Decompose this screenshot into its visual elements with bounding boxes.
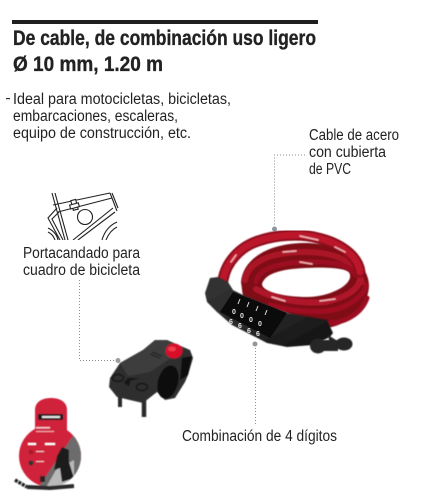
lock photo xyxy=(205,235,369,354)
digits: 0 xyxy=(249,317,253,324)
label: steel cable xyxy=(309,127,399,178)
title xyxy=(13,27,316,76)
lock body xyxy=(205,277,333,347)
leader line: bracket xyxy=(80,280,120,363)
title: Ø 10 mm, 1.20 m xyxy=(13,53,163,76)
digits: 6 xyxy=(247,328,251,335)
leader line: steel cable xyxy=(272,155,305,232)
product package xyxy=(15,398,84,491)
label: bicycle frame bracket: cuadro de bicicleta xyxy=(23,262,140,279)
key xyxy=(310,335,352,354)
label: steel cable: Cable de acero xyxy=(309,127,399,144)
label: steel cable: de PVC xyxy=(309,161,351,178)
leader line: combination xyxy=(252,342,258,426)
description bullet text: equipo de construcción, etc. xyxy=(13,125,191,142)
title: De cable, de combinación uso ligero xyxy=(13,27,316,50)
icon: bicycle frame with bracket xyxy=(48,193,118,240)
digits xyxy=(229,299,267,338)
digits: 0 xyxy=(240,313,244,320)
label: bicycle frame bracket: Portacandado para xyxy=(23,245,140,262)
digits: 6 xyxy=(256,331,260,338)
digits: 0 xyxy=(258,321,262,328)
description bullet text xyxy=(6,91,231,142)
label: combination: Combinación de 4 dígitos xyxy=(182,428,337,445)
red cable coils xyxy=(223,235,369,328)
package photo wedge xyxy=(40,435,82,487)
combination wheels xyxy=(220,292,287,338)
digits: 6 xyxy=(229,319,233,326)
description bullet text: Ideal para motocicletas, bicicletas, xyxy=(13,91,231,108)
description bullet text: embarcaciones, escaleras, xyxy=(13,108,178,125)
bracket photo xyxy=(109,340,193,417)
digits: 0 xyxy=(232,309,236,316)
label: bicycle frame bracket xyxy=(23,245,140,279)
digits: 6 xyxy=(238,323,242,330)
top rule xyxy=(12,20,318,24)
label: steel cable: con cubierta xyxy=(309,144,386,161)
